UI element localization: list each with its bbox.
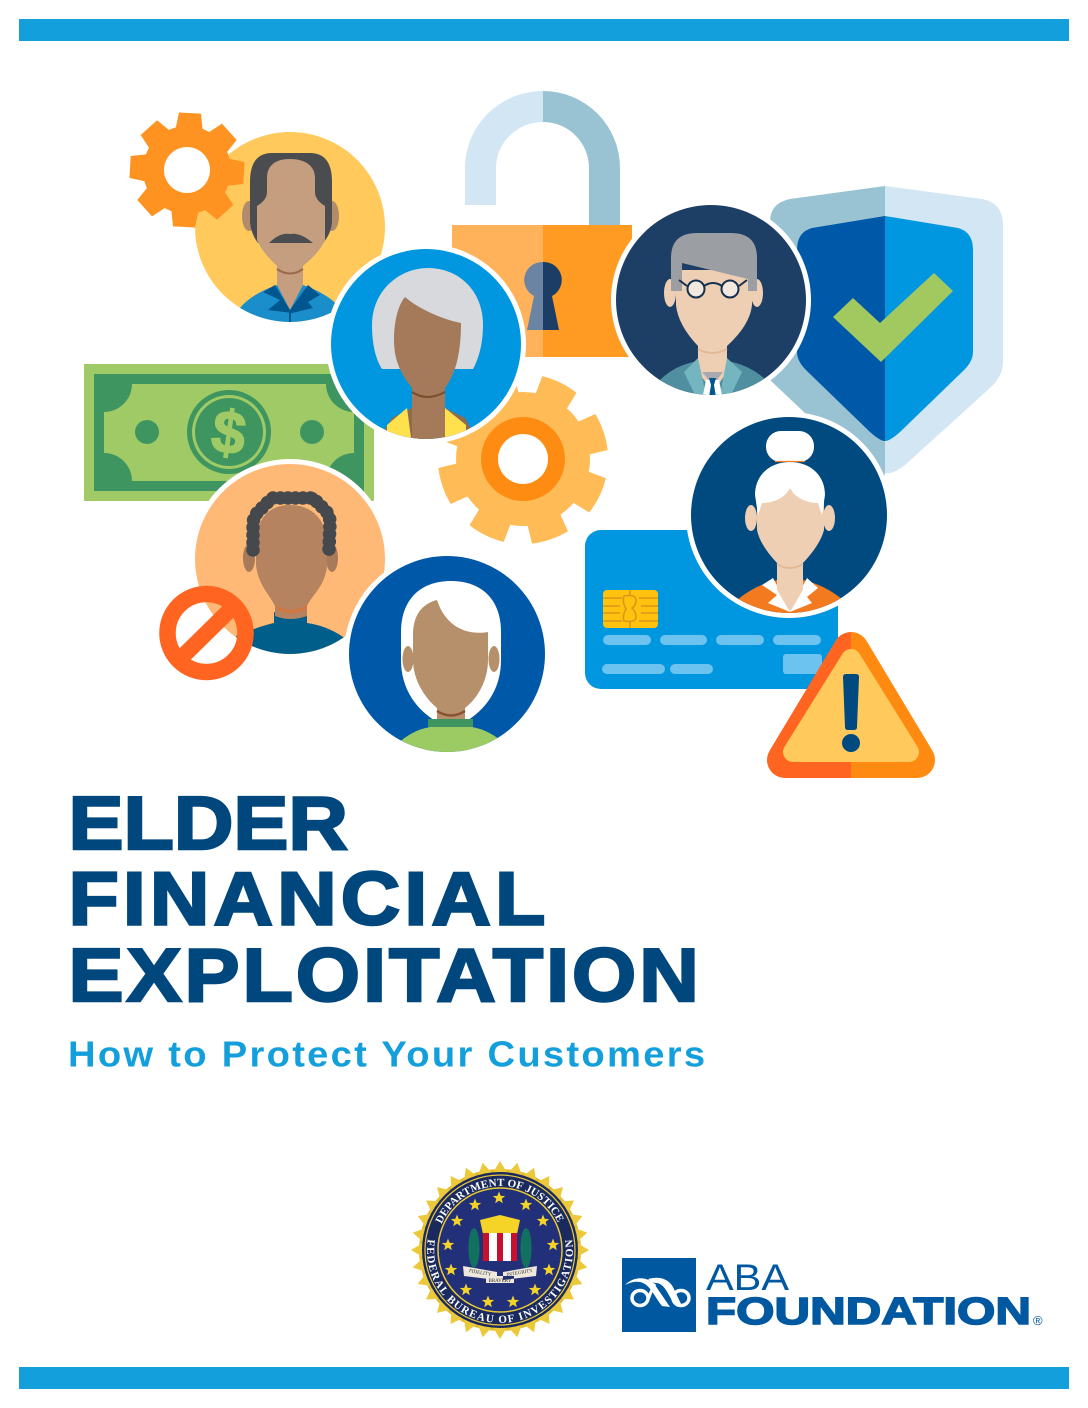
title xyxy=(68,781,699,1017)
top bar xyxy=(19,19,1069,41)
person: woman with white hair xyxy=(344,551,550,760)
person: man with glasses xyxy=(611,200,811,400)
title: FINANCIAL xyxy=(68,857,545,941)
logo: FBI seal xyxy=(411,1161,589,1339)
logo: FBI seal: DEPARTMENT OF JUSTICE xyxy=(435,1178,564,1224)
logo: FBI seal: INTEGRITY xyxy=(506,1269,534,1278)
logo: ABA Foundation: ® xyxy=(1033,1313,1043,1328)
logo: ABA Foundation: ABA xyxy=(706,1257,789,1298)
logo: FBI seal: FIDELITY xyxy=(469,1269,492,1278)
person: man with mustache xyxy=(195,132,385,322)
icon: dollar bill xyxy=(84,364,374,501)
icon: dollar bill: $ xyxy=(208,397,250,468)
logo: ABA Foundation xyxy=(622,1257,1043,1333)
icon: credit card xyxy=(585,530,838,689)
logo: ABA Foundation: FOUNDATION xyxy=(706,1291,1031,1333)
icon: large gear xyxy=(436,372,610,546)
logo: FBI seal: FEDERAL BUREAU OF INVESTIGATION xyxy=(427,1239,574,1323)
person: woman with grey hair xyxy=(326,244,526,445)
person: woman with bun xyxy=(686,412,892,620)
icon: small gear xyxy=(129,112,245,228)
logo: FBI seal: BRAVERY xyxy=(489,1279,512,1284)
title: ELDER xyxy=(68,781,348,865)
icon: warning triangle xyxy=(785,650,917,760)
person: man with curly hair xyxy=(195,459,385,654)
icon: shield with check mark xyxy=(770,186,1003,476)
bottom bar xyxy=(19,1367,1069,1389)
icon: prohibition sign xyxy=(168,594,246,672)
icon: padlock xyxy=(452,91,632,357)
subtitle: How to Protect Your Customers xyxy=(68,1034,705,1074)
title: EXPLOITATION xyxy=(68,933,699,1017)
